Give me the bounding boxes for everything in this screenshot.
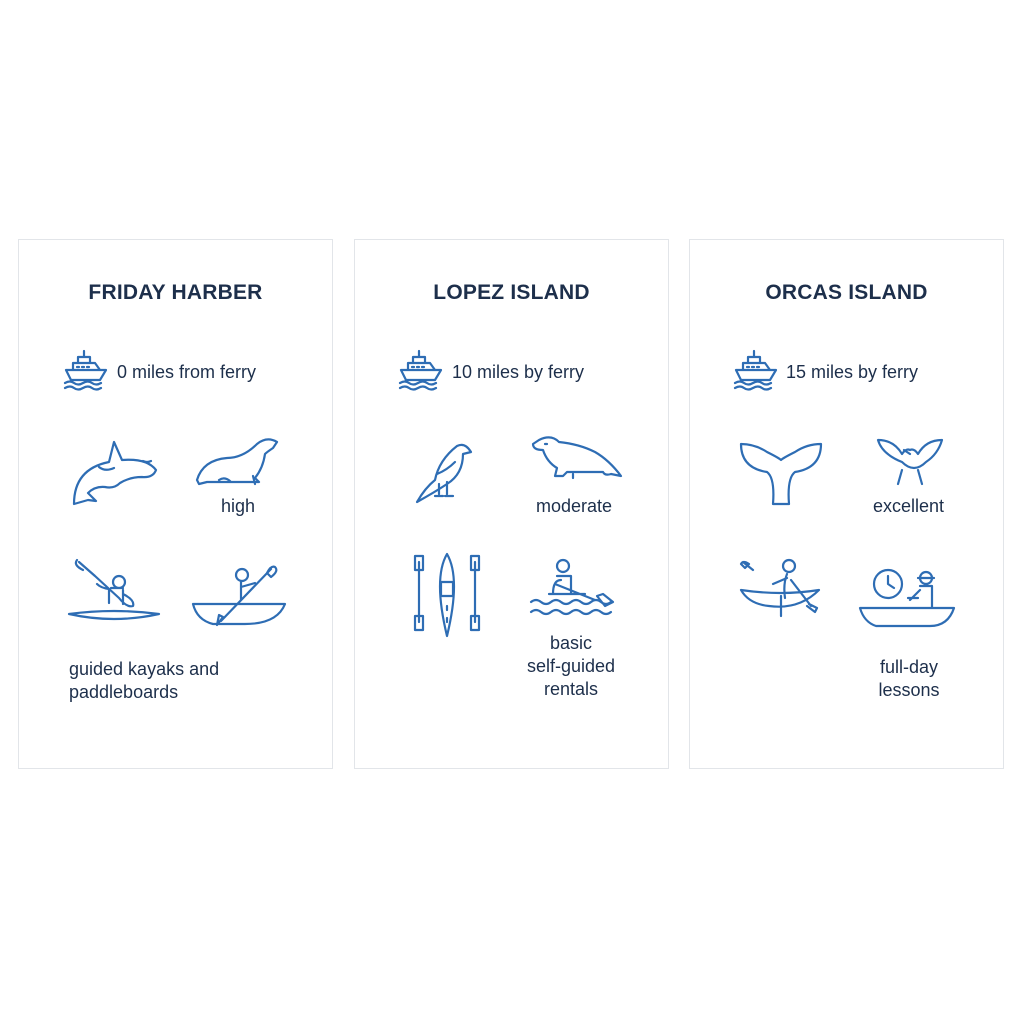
icon: ferry: [734, 350, 778, 391]
text: activities: basic: [550, 633, 592, 653]
icon: kayaker: [68, 558, 160, 620]
heading: LOPEZ ISLAND: [433, 281, 590, 304]
panel: Friday Harber: [18, 239, 333, 769]
icon: kayak with paddles: [414, 552, 480, 638]
text: activities: lessons: [878, 680, 940, 700]
text: activities: [527, 633, 615, 699]
icon: eagle: [876, 438, 944, 486]
icon: ferry: [398, 350, 442, 391]
text: activities: self-guided: [527, 656, 615, 676]
icon: seal: [196, 438, 278, 486]
text: wildlife rating: excellent: [873, 496, 944, 516]
text: activities: rentals: [544, 679, 598, 699]
icon: otter: [532, 436, 622, 480]
heading: ORCAS ISLAND: [765, 281, 928, 304]
panel: Lopez Island: [354, 239, 669, 769]
icon: ferry: [64, 350, 108, 391]
icon: paddler in water: [530, 558, 614, 616]
icon: clock and boat: [858, 568, 956, 628]
text: activities: [69, 659, 219, 702]
text: activities: guided kayaks and: [69, 659, 219, 679]
panel: Orcas Island: [689, 239, 1004, 769]
text: distance: 0 miles from ferry: [117, 362, 256, 382]
heading: FRIDAY HARBER: [88, 281, 263, 304]
icon: whale tail: [740, 442, 822, 506]
text: wildlife rating: high: [221, 496, 255, 516]
text: distance: 10 miles by ferry: [452, 362, 584, 382]
text: distance: 15 miles by ferry: [786, 362, 918, 382]
icon: orca: [72, 440, 158, 506]
text: activities: paddleboards: [69, 682, 178, 702]
text: wildlife rating: moderate: [536, 496, 612, 516]
text: activities: [878, 657, 940, 700]
icon: bird: [416, 444, 472, 504]
icon: canoe paddler: [192, 566, 286, 626]
text: activities: full-day: [880, 657, 938, 677]
icon: kayaker: [740, 558, 820, 618]
